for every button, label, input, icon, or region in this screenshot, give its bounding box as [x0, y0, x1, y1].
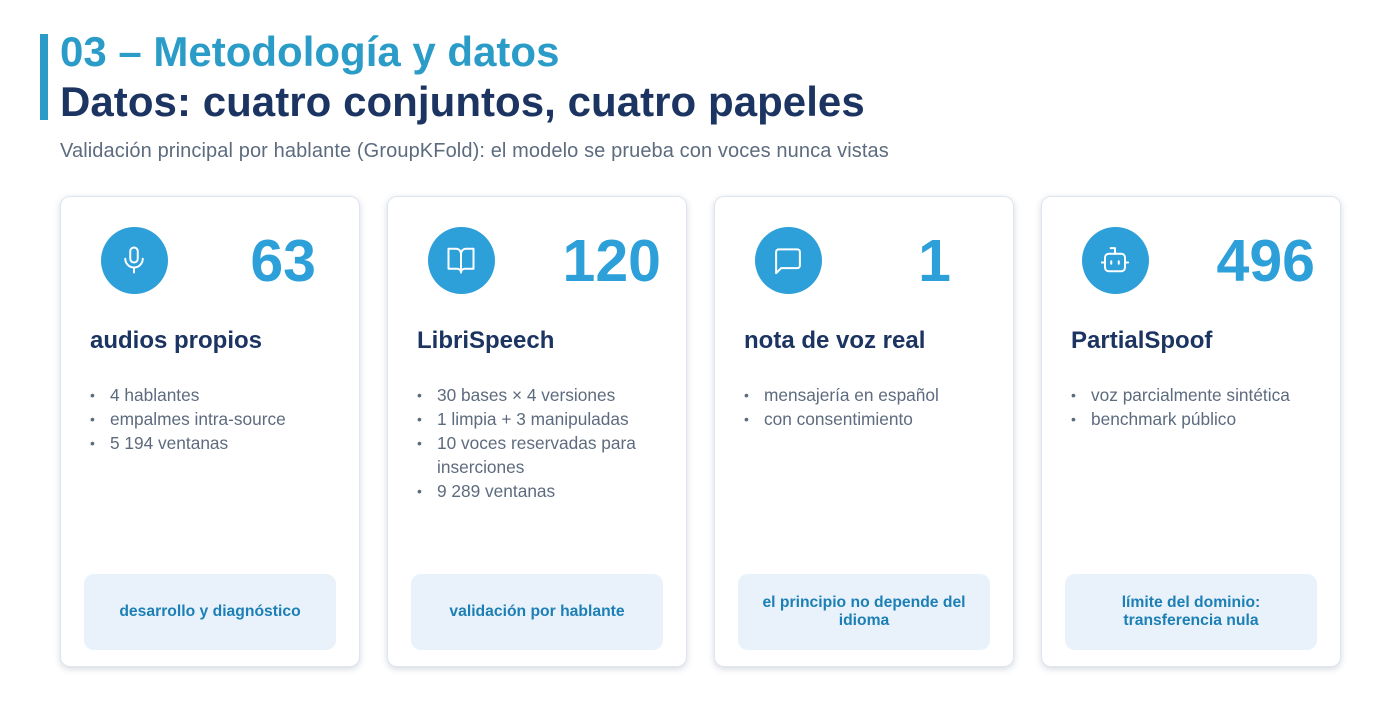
card heading: PartialSpoof [1071, 326, 1212, 354]
icon: microphone [100, 226, 168, 294]
bullet list: mensajería en español [764, 384, 939, 404]
panel: LibriSpeech [387, 196, 687, 667]
bullet list: 30 bases × 4 versiones [437, 384, 615, 404]
bullet list [1072, 384, 1290, 428]
role label: idioma [839, 612, 889, 628]
bullet list [744, 384, 939, 428]
icon: speech bubble [754, 226, 822, 294]
number: 1: 1 [918, 228, 951, 294]
bullet list: voz parcialmente sintética [1091, 384, 1290, 404]
bullet list [418, 384, 636, 500]
role label: límite del dominio: [1122, 594, 1260, 610]
number: 496: 496 [1217, 228, 1315, 294]
section heading: 03 – Metodología y datos [60, 28, 559, 75]
bullet list: benchmark público [1091, 408, 1236, 428]
role label: transferencia nula [1123, 612, 1259, 628]
card heading: nota de voz real [744, 326, 925, 354]
card heading: LibriSpeech [417, 326, 554, 354]
role label: desarrollo y diagnóstico [119, 602, 301, 620]
role label: validación por hablante [449, 602, 625, 620]
bullet list: 1 limpia + 3 manipuladas [437, 408, 629, 428]
bullet list: 10 voces reservadas para inserciones [437, 432, 636, 476]
bullet list: con consentimiento [764, 408, 913, 428]
role label [1065, 574, 1317, 650]
role label [411, 574, 663, 650]
bullet list: 5 194 ventanas [110, 432, 228, 452]
number: 120: 120 [563, 228, 661, 294]
title: Datos: cuatro conjuntos, cuatro papeles [60, 78, 865, 125]
panel: nota de voz real [714, 196, 1014, 667]
card heading: audios propios [90, 326, 262, 354]
role label [84, 574, 336, 650]
bullet list: 4 hablantes [110, 384, 199, 404]
role label [738, 574, 990, 650]
accent bar [40, 34, 48, 120]
icon: open book [428, 226, 494, 294]
bullet list: empalmes intra-source [110, 408, 286, 428]
bullet list: 9 289 ventanas [437, 480, 555, 500]
bullet list [90, 384, 286, 452]
number: 63: 63 [250, 228, 316, 294]
panel: audios propios [60, 196, 360, 667]
panel: PartialSpoof [1041, 196, 1341, 667]
icon: robot [1082, 226, 1148, 294]
role label: el principio no depende del [762, 594, 966, 610]
subtitle: Validación principal por hablante (GroupKFold): el modelo se prueba con voces nunca vistas [60, 140, 889, 162]
